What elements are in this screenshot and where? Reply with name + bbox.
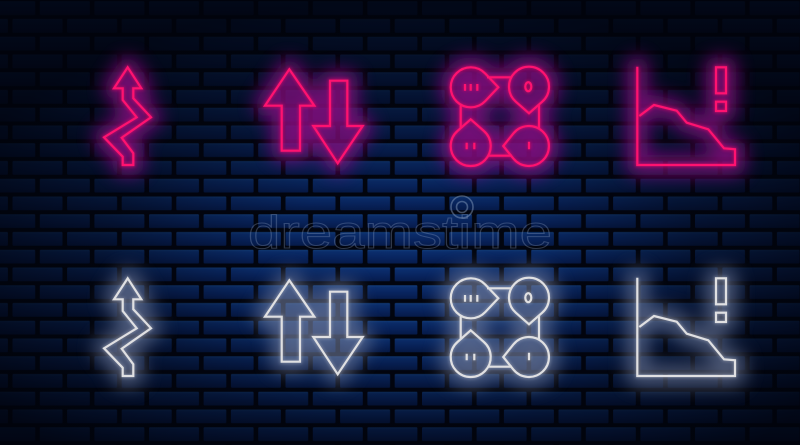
icon: white neon up and down arrows: [265, 280, 363, 374]
icon: pink neon up and down arrows: [265, 69, 363, 163]
icon: pink neon four connected pins: [451, 67, 549, 166]
watermark: dreamstime: [248, 196, 552, 258]
text: dreamstime wordmark: dreamstime: [248, 206, 552, 258]
icon: watermark logo spiral: [451, 196, 473, 218]
icon: white neon falling chart with exclamation mark: [637, 278, 735, 376]
icon: white neon four connected pins: [451, 278, 549, 377]
icon: white neon zigzag arrow: [104, 278, 151, 376]
icon: pink neon falling chart with exclamation mark: [637, 67, 735, 165]
icon: pink neon zigzag arrow: [104, 67, 151, 165]
